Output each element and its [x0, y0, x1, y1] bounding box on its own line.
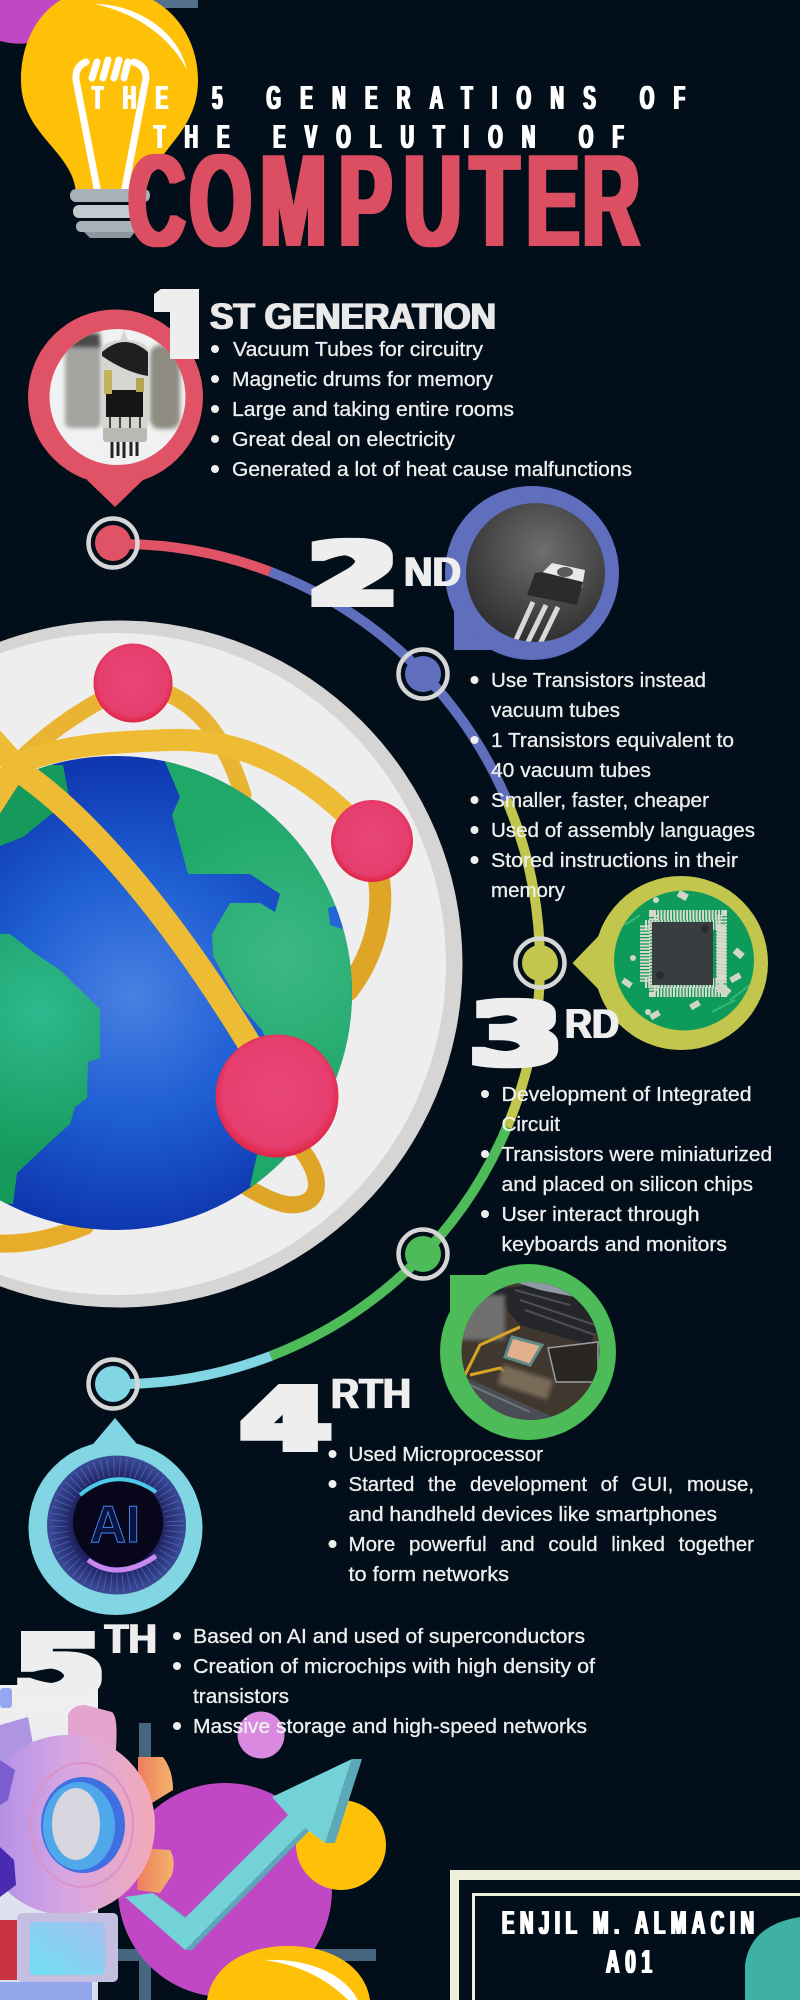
yellow circle — [296, 1800, 386, 1890]
continent right — [164, 761, 352, 1187]
frame — [450, 1870, 800, 2000]
timeline arc — [120, 544, 540, 1384]
list: vacuum tubes — [491, 699, 620, 722]
pin: generation 3 chip — [572, 876, 768, 1050]
list: Started the development of GUI, mouse, — [348, 1473, 754, 1496]
top decoration: purple circle and bar — [0, 0, 198, 44]
number 5: 5 — [13, 1618, 105, 1717]
magenta circle — [118, 1783, 332, 1997]
photo: transistor — [465, 502, 607, 644]
title line 2: THE EVOLUTION OF — [154, 118, 624, 155]
number 1: 1 — [158, 266, 206, 378]
front rings — [0, 735, 372, 1065]
pin: generation 4 motherboard — [440, 1264, 616, 1440]
list: Great deal on electricity — [232, 428, 456, 451]
title — [92, 79, 685, 275]
author name: ENJIL M. ALMACIN — [502, 1904, 754, 1941]
photo: motherboard — [460, 1280, 605, 1425]
node 3 — [516, 938, 564, 988]
list: Stored instructions in their — [491, 849, 738, 872]
title main word: COMPUTER — [128, 127, 640, 275]
list: Used Microprocessor — [348, 1443, 543, 1466]
continent left — [0, 930, 100, 1204]
list: Massive storage and high-speed networks — [193, 1715, 587, 1738]
list: Based on AI and used of superconductors — [193, 1625, 585, 1648]
node ball right — [331, 800, 413, 882]
heading: ST GENERATION — [210, 296, 496, 337]
number 2: 2 — [307, 526, 399, 625]
list: Smaller, faster, cheaper — [491, 789, 709, 812]
lower bulb — [207, 1946, 370, 2000]
arrow — [125, 1759, 362, 1950]
pin: generation 1 vacuum tube — [28, 310, 203, 507]
list: and handheld devices like smartphones — [348, 1503, 717, 1526]
list: More powerful and could linked together — [348, 1533, 754, 1556]
heading suffix: RTH — [331, 1370, 411, 1418]
section: generation 2 — [307, 526, 755, 902]
list: 1 Transistors equivalent to — [491, 729, 734, 752]
list — [173, 1625, 595, 1738]
heading suffix: TH — [104, 1615, 157, 1662]
photo: vacuum tube — [50, 329, 186, 465]
continent top-left — [0, 765, 70, 850]
photo: circuit board — [612, 889, 757, 1034]
list: to form networks — [348, 1563, 509, 1586]
list: Generated a lot of heat cause malfunctions — [232, 458, 632, 481]
list — [211, 338, 632, 481]
lilac patch on column — [0, 1688, 12, 1708]
list: keyboards and monitors — [502, 1233, 727, 1256]
section: generation 4 — [240, 1370, 754, 1586]
section: generation 1 — [154, 289, 632, 476]
number 4: 4 — [240, 1371, 332, 1470]
node 1 — [88, 518, 138, 568]
earth sphere — [0, 750, 360, 1235]
list — [470, 669, 755, 902]
list: 40 vacuum tubes — [491, 759, 651, 782]
title line 1: THE 5 GENERATIONS OF — [92, 79, 685, 116]
blue patch on right edge — [328, 906, 344, 930]
pin: generation 2 transistor — [445, 486, 619, 660]
list: Use Transistors instead — [491, 669, 706, 692]
teal shape — [745, 1917, 800, 2000]
list: Circuit — [502, 1113, 560, 1136]
list: Magnetic drums for memory — [232, 368, 494, 391]
back rings — [0, 683, 380, 1244]
heading suffix: ND — [404, 548, 461, 595]
grid bars — [118, 1723, 376, 2000]
list: memory — [491, 879, 566, 902]
list: Large and taking entire rooms — [232, 398, 514, 421]
node 2 — [398, 650, 448, 698]
list: Vacuum Tubes for circuitry — [233, 338, 484, 361]
list: Development of Integrated — [502, 1083, 752, 1106]
list: Used of assembly languages — [491, 819, 755, 842]
node ball top — [94, 644, 172, 722]
small pink circle — [238, 1712, 284, 1758]
pin: generation 5 AI — [28, 1418, 202, 1615]
heading suffix: RD — [565, 1000, 619, 1047]
list: Creation of microchips with high density of — [193, 1655, 595, 1678]
gear — [0, 1705, 174, 1915]
pale column — [0, 1685, 98, 2000]
icon: light bulb — [21, 0, 198, 238]
photo: AI eye: AI — [90, 1496, 140, 1554]
list: transistors — [193, 1685, 289, 1708]
node 5 — [88, 1360, 138, 1408]
section code: A01 — [606, 1943, 652, 1980]
credit panel — [450, 1870, 800, 2000]
list: Transistors were miniaturized — [502, 1143, 772, 1166]
white disc — [0, 620, 462, 1308]
bottom-left decoration — [0, 1685, 386, 2000]
timeline nodes — [88, 518, 564, 1408]
number 3: 3 — [469, 986, 563, 1085]
list — [328, 1443, 754, 1586]
photo: AI eye — [45, 1453, 188, 1596]
globe illustration — [0, 620, 462, 1308]
list: and placed on silicon chips — [502, 1173, 753, 1196]
node 4 — [398, 1230, 448, 1278]
list: User interact through — [502, 1203, 700, 1226]
glass block — [0, 1913, 118, 2000]
section: generation 3 — [469, 986, 772, 1256]
node ball large — [216, 1034, 338, 1158]
list — [481, 1083, 772, 1256]
section: generation 5 — [13, 1615, 595, 1738]
